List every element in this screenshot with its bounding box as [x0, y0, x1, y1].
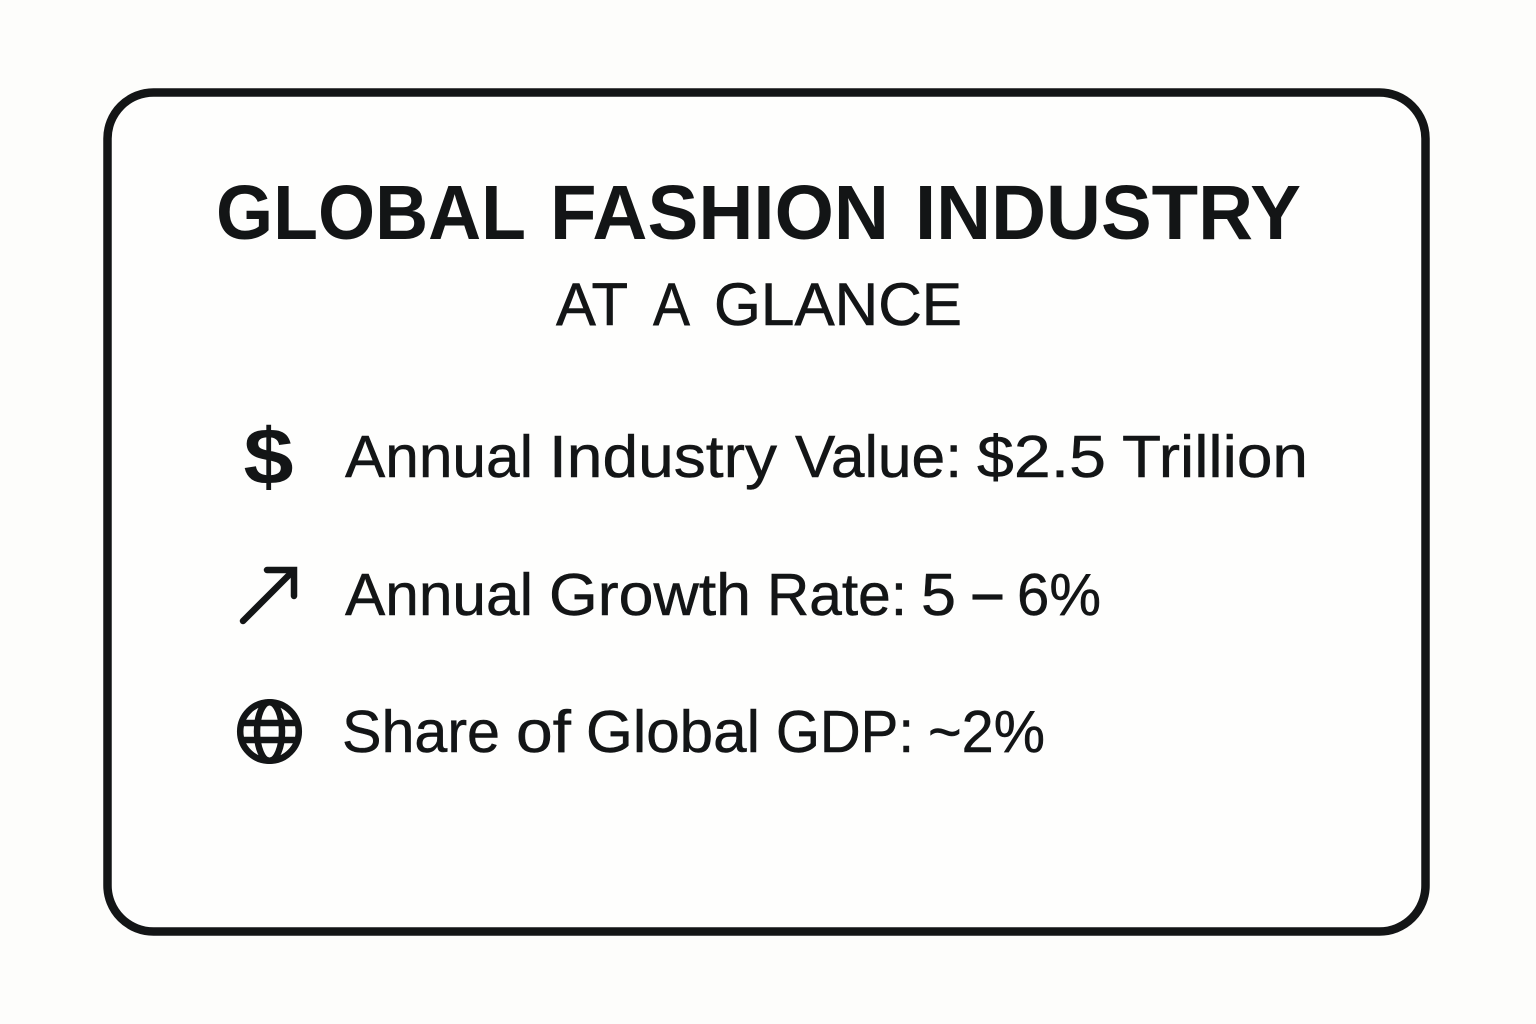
icon: dollar sign: $ — [244, 412, 294, 501]
subtitle: AT — [556, 271, 628, 338]
label: share of global gdp: Global — [586, 699, 760, 765]
label: annual industry value: Industry — [549, 424, 778, 490]
row: share of global gdp — [240, 699, 1045, 765]
label: annual growth rate — [345, 559, 1101, 628]
title: FASHION — [550, 170, 889, 256]
title: GLOBAL — [216, 170, 526, 256]
subtitle: A — [653, 271, 690, 338]
title — [216, 170, 1301, 256]
title: INDUSTRY — [915, 170, 1301, 256]
label: annual industry value: Trillion — [1122, 424, 1308, 490]
row: annual growth rate — [243, 559, 1101, 628]
label: annual growth rate: Growth — [549, 562, 751, 628]
label: annual industry value: Value: — [795, 424, 962, 490]
row: annual industry value — [244, 412, 1308, 501]
label: annual growth rate: Rate: — [767, 562, 907, 628]
label: share of global gdp: of — [516, 699, 572, 765]
label: annual growth rate: – — [973, 559, 1002, 625]
label: annual industry value — [345, 424, 1308, 490]
label: annual industry value: Annual — [345, 424, 533, 490]
panel: card frame — [108, 92, 1426, 932]
label: share of global gdp: Share — [342, 699, 500, 765]
icon: globe — [240, 702, 299, 761]
label: share of global gdp: ~2% — [928, 699, 1045, 765]
label: share of global gdp — [342, 699, 1045, 765]
label: share of global gdp: GDP: — [776, 699, 914, 765]
label: annual growth rate: 6% — [1017, 562, 1101, 628]
label: annual industry value: $2.5 — [977, 424, 1106, 490]
label: annual growth rate: 5 — [921, 562, 956, 628]
icon: up-right arrow — [243, 570, 294, 621]
subtitle — [556, 271, 962, 338]
label: annual growth rate: Annual — [345, 562, 533, 628]
subtitle: GLANCE — [714, 271, 962, 338]
